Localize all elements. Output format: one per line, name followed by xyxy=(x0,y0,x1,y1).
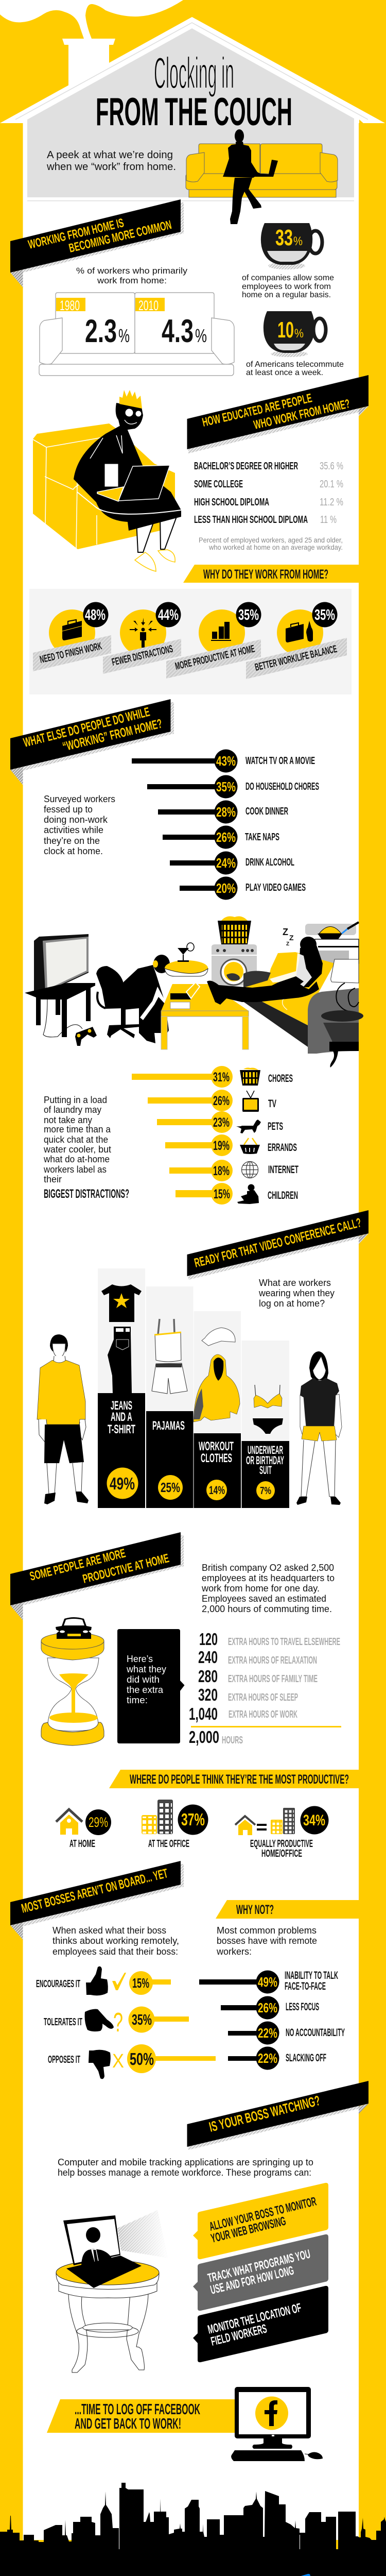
coffee cup 10 percent: % xyxy=(294,327,304,341)
text: 33 percent xyxy=(242,274,334,299)
row: inability: 49% xyxy=(258,1974,277,1990)
slippers xyxy=(135,550,175,571)
banner: working from home xyxy=(10,199,184,287)
banner: some people more productive xyxy=(10,1532,184,1620)
row: opposes: X xyxy=(112,2050,124,2072)
bar: pets: PETS xyxy=(268,1121,283,1132)
row: 320 xyxy=(198,1685,298,1704)
zzz xyxy=(283,927,294,947)
stove with pot xyxy=(305,922,359,966)
gable wall xyxy=(27,28,354,197)
text: british company O2: 2,000 hours of commuting time. xyxy=(202,1604,332,1614)
text: british company O2: work from home for one day. xyxy=(201,1583,320,1594)
car xyxy=(56,1617,92,1639)
row: 240: 240 xyxy=(198,1648,218,1667)
text: surveyed workers: fessed up to xyxy=(44,804,93,815)
banner: most bosses: MOST BOSSES AREN’T ON BOARD... YET xyxy=(20,1866,169,1916)
row: inability: INABILITY TO TALK xyxy=(285,1970,338,1981)
bar: 43 percent: 43% xyxy=(216,753,236,769)
bar: 28 percent xyxy=(158,801,288,823)
row: encourages xyxy=(36,1967,171,1995)
text: 33 percent: home on a regular basis. xyxy=(242,291,331,299)
heading: time to log off facebook: ...TIME TO LOG OFF FACEBOOK xyxy=(75,2401,200,2418)
column: jeans and t-shirt: T-SHIRT xyxy=(108,1422,135,1436)
bar: errands: 19% xyxy=(213,1139,230,1153)
2010 value xyxy=(135,298,207,349)
reason: need to finish work: 48% xyxy=(85,607,106,623)
bar: 26 percent: 26% xyxy=(216,829,236,845)
row: less focus: 26% xyxy=(258,2000,277,2015)
2010 value: % xyxy=(195,325,207,346)
row: 280: EXTRA HOURS OF FAMILY TIME xyxy=(228,1673,318,1685)
subtitle: A peek at what we’re doing xyxy=(47,149,173,161)
callout: here's what they did: what they xyxy=(126,1664,166,1674)
sand xyxy=(59,1673,89,1689)
illustration: living room scene xyxy=(25,917,363,1067)
bar: pets xyxy=(157,1111,283,1133)
banner: working from home: BECOMING MORE COMMON xyxy=(67,218,173,256)
row: total: HOURS xyxy=(222,1735,243,1746)
2010 value: 4.3 xyxy=(162,313,194,349)
sofa outline xyxy=(39,293,234,376)
bar: 35 percent xyxy=(147,775,319,799)
man torso and head xyxy=(74,390,181,531)
text: when asked: thinks about working remotely, xyxy=(52,1936,179,1946)
column: underwear: 7% xyxy=(260,1485,271,1497)
row: 240: EXTRA HOURS OF RELAXATION xyxy=(228,1655,317,1666)
reason: fewer distractions: 44% xyxy=(158,607,179,623)
stat: equally productive xyxy=(235,1806,328,1859)
education note: Percent of employed workers, aged 25 and older, xyxy=(199,536,343,544)
reason: more productive xyxy=(166,602,261,679)
bar: internet: INTERNET xyxy=(268,1164,299,1176)
game controller xyxy=(75,1027,97,1046)
table top xyxy=(56,2260,159,2298)
illustration: woman in t-shirt xyxy=(296,1351,342,1505)
bar: internet xyxy=(169,1160,299,1181)
1980 value: % xyxy=(118,325,130,346)
stat: at the office xyxy=(142,1800,208,1850)
heading: why do they work from home xyxy=(183,565,359,583)
high school: 11.2 % xyxy=(320,497,343,508)
eaves xyxy=(359,120,364,124)
coffee cup 33 percent xyxy=(261,223,322,269)
text: when asked xyxy=(52,1925,179,1957)
reason: need to finish work: NEED TO FINISH WORK xyxy=(39,640,103,666)
tv and stand xyxy=(25,934,95,1037)
laundry basket xyxy=(218,917,251,944)
1980 value: 2.3 xyxy=(85,313,117,349)
less than high school: 11 % xyxy=(320,514,337,526)
text: british company O2: Employees saved an estimated xyxy=(202,1594,326,1604)
text: 33 percent: employees to work from xyxy=(242,282,331,291)
text: percent of workers: % of workers who primarily xyxy=(76,266,188,276)
column: underwear: UNDERWEAR xyxy=(248,1444,283,1456)
column: underwear xyxy=(242,1341,289,1508)
heading: where do people think xyxy=(109,1770,359,1788)
text: common problems: Most common problems xyxy=(217,1925,317,1936)
column: pajamas: PAJAMAS xyxy=(152,1419,185,1433)
bar: pets: 23% xyxy=(213,1115,230,1130)
callout: monitor location: MONITOR THE LOCATION OF xyxy=(206,2301,303,2337)
text: common problems xyxy=(216,1925,317,1957)
text: percent of workers: work from home: xyxy=(97,276,167,285)
banner: some people more productive: SOME PEOPLE ARE MORE xyxy=(28,1546,127,1584)
coffee table xyxy=(161,982,249,1049)
text: british company O2: employees at its headquarters to xyxy=(202,1573,335,1583)
laptop xyxy=(63,2215,142,2288)
bar: 35 percent: 35% xyxy=(216,779,236,794)
text: percent of workers xyxy=(76,266,188,285)
text: tracking applications: help bosses manage a remote workforce. These programs can: xyxy=(58,2167,311,2178)
washing machine xyxy=(212,944,257,986)
row: 1,040: EXTRA HOURS OF WORK xyxy=(229,1709,297,1720)
stat: equally productive: EQUALLY PRODUCTIVE xyxy=(250,1838,313,1850)
text: surveyed workers: clock at home. xyxy=(44,846,103,856)
stat: at home xyxy=(56,1809,111,1850)
row: slacking off xyxy=(228,2046,326,2070)
text: tracking applications: Computer and mobile tracking applications are springing up to xyxy=(58,2157,313,2167)
stat: at the office: AT THE OFFICE xyxy=(148,1838,189,1850)
bar: tv xyxy=(148,1090,276,1112)
row: slacking off: SLACKING OFF xyxy=(286,2052,326,2064)
callout: here's what they did: Here’s xyxy=(127,1654,153,1664)
panel: reasons xyxy=(29,589,352,694)
reason: need to finish work xyxy=(33,602,111,671)
banner: video conference xyxy=(187,1210,369,1280)
education note xyxy=(199,536,343,551)
row: opposes: OPPOSES IT xyxy=(48,2054,80,2065)
sofa with sleeper xyxy=(207,937,359,1054)
stat: at the office: 37% xyxy=(181,1810,205,1829)
high school: HIGH SCHOOL DIPLOMA xyxy=(194,497,269,508)
row: 120 xyxy=(199,1630,340,1649)
zzz: Z xyxy=(289,934,294,942)
man legs xyxy=(136,513,178,552)
bar: 20 percent xyxy=(180,877,306,900)
less than high school: LESS THAN HIGH SCHOOL DIPLOMA xyxy=(194,514,308,526)
skyline xyxy=(0,2483,386,2576)
coffee cup 10 percent xyxy=(264,311,326,357)
text: surveyed workers: doing non-work xyxy=(44,815,108,825)
bar: chores xyxy=(132,1066,293,1088)
heading: why not: WHY NOT? xyxy=(236,1903,274,1917)
banner: how educated: HOW EDUCATED ARE PEOPLE xyxy=(201,391,313,430)
text: when asked: When asked what their boss xyxy=(52,1925,166,1936)
row: tolerates: TOLERATES IT xyxy=(44,2016,82,2028)
bar: 26 percent xyxy=(163,825,279,849)
row: 120: 120 xyxy=(199,1630,218,1649)
callout: monitor location xyxy=(193,2286,328,2362)
callout: monitor location: FIELD WORKERS xyxy=(209,2321,268,2349)
illustration: man in t-shirt xyxy=(37,1334,89,1504)
chart: boss problems: LESS FOCUS xyxy=(286,2001,319,2013)
row: tolerates: ? xyxy=(113,2008,123,2038)
text: tracking applications xyxy=(58,2157,313,2178)
callout: track programs xyxy=(193,2234,328,2311)
office chair xyxy=(96,966,140,1038)
column: workout clothes: 14% xyxy=(209,1484,225,1497)
zzz: Z xyxy=(286,941,289,947)
bachelor: 35.6 % xyxy=(320,461,343,472)
reason: work life balance xyxy=(246,602,347,679)
text: laundry: BIGGEST DISTRACTIONS? xyxy=(44,1187,129,1201)
chimney xyxy=(62,39,115,129)
text: common problems: bosses have with remote xyxy=(217,1936,317,1946)
education note: who worked at home on an average workday. xyxy=(208,544,343,551)
chart: boss attitudes xyxy=(36,1967,216,2079)
text: laundry: what do at-home xyxy=(43,1154,110,1164)
bar: tv: TV xyxy=(268,1098,276,1110)
text: 10 percent: of Americans telecommute xyxy=(246,360,344,369)
column: pajamas: 25% xyxy=(161,1480,180,1495)
1980 value: 1980 xyxy=(60,298,80,313)
table legs xyxy=(68,2293,148,2372)
some college xyxy=(194,479,343,490)
bar: 24 percent: DRINK ALCOHOL xyxy=(245,857,294,868)
coffee cup 10 percent: 10 xyxy=(277,317,294,343)
bar: errands: ERRANDS xyxy=(268,1142,297,1154)
bar: children: 15% xyxy=(214,1187,230,1201)
text: what are workers wearing: log on at home? xyxy=(259,1298,325,1309)
column: underwear: SUIT xyxy=(259,1464,272,1477)
banner: is your boss watching xyxy=(187,2081,369,2150)
text: laundry: more time than a xyxy=(44,1124,111,1134)
some college: 20.1 % xyxy=(320,479,343,490)
row: 320: 320 xyxy=(198,1685,218,1704)
webcam beam xyxy=(117,2210,167,2258)
stat: equally productive: 34% xyxy=(303,1812,325,1829)
education list xyxy=(194,461,343,526)
row: encourages: 15% xyxy=(132,1975,149,1991)
banner: what else: WHAT ELSE DO PEOPLE DO WHILE xyxy=(22,705,151,750)
some college: SOME COLLEGE xyxy=(194,479,243,490)
gamer xyxy=(123,955,178,1043)
row: 1,040: 1,040 xyxy=(189,1704,218,1723)
callout: here's what they did: time: xyxy=(127,1695,148,1705)
reason: work life balance: 35% xyxy=(314,607,335,623)
row: 320: EXTRA HOURS OF SLEEP xyxy=(228,1692,298,1703)
text: british company O2: British company O2 asked 2,500 xyxy=(202,1563,334,1573)
column: jeans and t-shirt xyxy=(98,1268,145,1508)
1980 value xyxy=(56,298,130,349)
text: laundry: water cooler, but xyxy=(43,1144,111,1155)
top cap xyxy=(41,1641,104,1660)
text: laundry: workers label as xyxy=(43,1164,107,1175)
mug and laptop xyxy=(97,464,170,501)
illustration: man on armchair xyxy=(33,390,181,571)
row: tolerates: 35% xyxy=(132,2012,152,2028)
bar: 28 percent: 28% xyxy=(216,804,236,820)
row: less focus xyxy=(221,1996,319,2020)
bar: 28 percent: COOK DINNER xyxy=(245,806,288,817)
text: surveyed workers xyxy=(44,794,115,856)
banner: what else xyxy=(10,699,174,785)
stat: at home: 29% xyxy=(89,1815,108,1830)
banner: how educated xyxy=(187,375,369,453)
row: no accountability xyxy=(228,2022,345,2044)
callout: monitor web browsing: YOUR WEB BROWSING xyxy=(209,2214,287,2246)
logo: online degrees xyxy=(252,2571,340,2576)
hero woman with laptop xyxy=(223,129,278,224)
text: laundry xyxy=(43,1095,129,1201)
bar: 20 percent: PLAY VIDEO GAMES xyxy=(245,882,306,893)
callout: here's what they did xyxy=(117,1629,184,1743)
stat: equally productive: HOME/OFFICE xyxy=(261,1848,302,1859)
banner: most bosses xyxy=(10,1861,184,1940)
callout: track programs: USE AND FOR HOW LONG xyxy=(209,2264,295,2297)
hero sofa xyxy=(186,144,338,197)
row: 280 xyxy=(198,1667,318,1686)
text: british company O2 xyxy=(201,1563,335,1614)
column: jeans and t-shirt: 49% xyxy=(110,1474,135,1493)
bar: 35 percent: DO HOUSEHOLD CHORES xyxy=(245,781,319,792)
text: 33 percent: of companies allow some xyxy=(242,274,334,282)
bar: children: CHILDREN xyxy=(268,1190,298,1201)
reason: fewer distractions xyxy=(103,602,181,674)
row: 280: 280 xyxy=(198,1667,218,1686)
icon: computer with facebook xyxy=(231,2387,323,2461)
text: what are workers wearing xyxy=(258,1278,335,1309)
bar chart: non-work activities xyxy=(132,749,319,900)
column: workout clothes: CLOTHES xyxy=(201,1451,232,1465)
base xyxy=(41,1722,104,1745)
title: Clocking in xyxy=(154,49,234,98)
bar: tv: 26% xyxy=(213,1094,230,1108)
subtitle xyxy=(46,149,176,173)
reason: more productive: 35% xyxy=(238,607,259,623)
heading: time to log off facebook xyxy=(47,2399,237,2433)
row: total: 2,000 xyxy=(189,1727,219,1747)
text: what are workers wearing: wearing when they xyxy=(258,1288,335,1298)
text: laundry: quick chat at the xyxy=(44,1134,108,1145)
heading: time to log off facebook: AND GET BACK TO WORK! xyxy=(75,2416,181,2432)
text: laundry: Putting in a load xyxy=(44,1095,107,1105)
column: underwear: OR BIRTHDAY xyxy=(246,1454,284,1467)
banner: working from home: WORKING FROM HOME IS xyxy=(27,216,125,252)
row: slacking off: 22% xyxy=(258,2050,277,2066)
row: inability: FACE-TO-FACE xyxy=(285,1980,326,1992)
armchair xyxy=(33,423,175,549)
column: jeans and t-shirt: JEANS xyxy=(111,1399,132,1413)
banner: some people more productive: PRODUCTIVE AT HOME xyxy=(81,1551,170,1586)
text: laundry: not take any xyxy=(44,1115,92,1125)
row: 1,040 xyxy=(189,1704,297,1723)
text: common problems: workers: xyxy=(216,1946,252,1957)
column: jeans and t-shirt: AND A xyxy=(111,1410,132,1424)
row: inability xyxy=(199,1970,338,1994)
row: encourages: ENCOURAGES IT xyxy=(36,1978,80,1990)
row: opposes: 50% xyxy=(130,2049,154,2069)
text: surveyed workers: activities while xyxy=(44,825,103,835)
row: 240 xyxy=(198,1648,317,1667)
callout: here's what they did: did with xyxy=(127,1674,160,1685)
2010 value: 2010 xyxy=(138,298,159,313)
bar: 26 percent: TAKE NAPS xyxy=(245,832,279,843)
illustration: laptop on table xyxy=(56,2210,167,2372)
stat: at home: AT HOME xyxy=(69,1838,95,1850)
text: laundry: of laundry may xyxy=(44,1105,101,1115)
bar: errands xyxy=(165,1134,297,1156)
clothing column chart xyxy=(98,1268,289,1508)
text: when asked: employees said that their boss: xyxy=(52,1946,178,1957)
heading: why not xyxy=(216,1900,359,1919)
zzz: Z xyxy=(283,927,288,937)
bar: 24 percent: 24% xyxy=(216,855,236,871)
bar chart: biggest distractions xyxy=(132,1066,299,1205)
bar: chores: CHORES xyxy=(268,1073,293,1084)
coffee cup 33 percent: % xyxy=(293,234,303,248)
list: extra hours xyxy=(189,1630,341,1747)
chart: boss problems xyxy=(199,1970,345,2070)
bar: internet: 18% xyxy=(213,1164,230,1178)
callout: here's what they did: the extra xyxy=(127,1685,164,1695)
bachelor: BACHELOR’S DEGREE OR HIGHER xyxy=(194,461,298,472)
text: surveyed workers: Surveyed workers xyxy=(44,794,115,804)
banner: what else: “WORKING” FROM HOME? xyxy=(61,716,164,754)
text: surveyed workers: they’re on the xyxy=(44,836,100,846)
bar: 20 percent: 20% xyxy=(216,880,236,896)
illustration: hourglass with car xyxy=(41,1617,104,1745)
callout: monitor web browsing xyxy=(193,2183,328,2259)
coffee cup 33 percent: 33 xyxy=(275,225,293,250)
reason: more productive: MORE PRODUCTIVE AT HOME xyxy=(174,643,256,672)
text: 10 percent: at least once a week. xyxy=(246,368,323,377)
text: laundry: their xyxy=(44,1174,62,1184)
bar: 43 percent: WATCH TV OR A MOVIE xyxy=(245,755,315,767)
bar: 43 percent xyxy=(132,749,315,773)
column: workout clothes xyxy=(194,1311,241,1508)
lamp and side table xyxy=(321,959,363,1067)
outline sofa chart xyxy=(39,293,234,376)
smoke from chimney xyxy=(0,0,183,39)
text: 10 percent xyxy=(246,360,344,377)
text: what are workers wearing: What are workers xyxy=(259,1278,331,1288)
row: opposes xyxy=(48,2044,216,2079)
column: workout clothes: WORKOUT xyxy=(199,1439,234,1453)
glass xyxy=(47,1658,99,1731)
martini glass on side table xyxy=(165,943,208,976)
title xyxy=(96,49,292,134)
row: no accountability: 22% xyxy=(258,2025,277,2041)
subtitle: when we “work” from home. xyxy=(46,161,176,173)
row: tolerates xyxy=(44,2006,189,2038)
bar: chores: 31% xyxy=(213,1070,230,1084)
reason: fewer distractions: FEWER DISTRACTIONS xyxy=(111,643,174,668)
bar: children xyxy=(176,1183,298,1205)
column: pajamas xyxy=(146,1286,194,1508)
bar: 24 percent xyxy=(170,851,294,875)
